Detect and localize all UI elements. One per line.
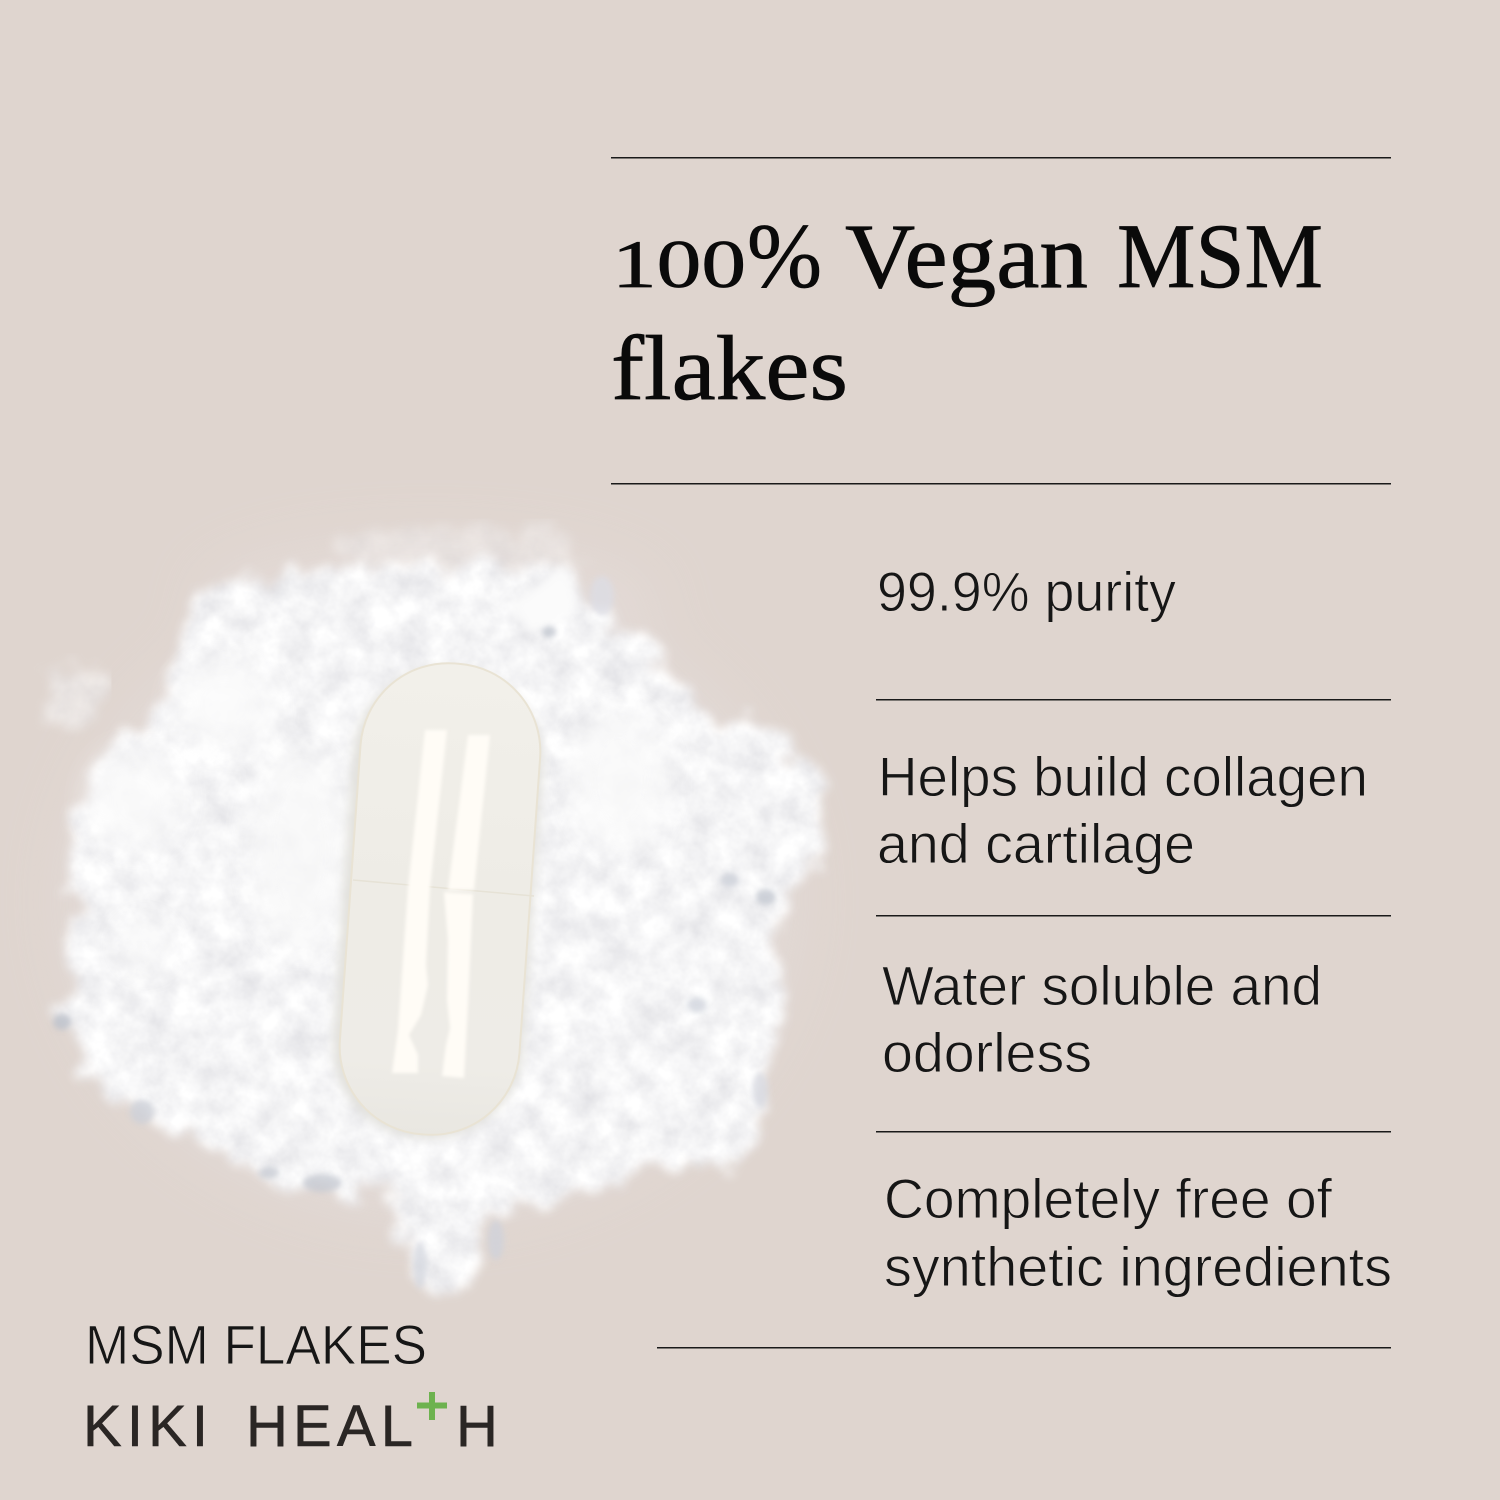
rule 1	[876, 699, 1391, 700]
capsule	[327, 657, 549, 1144]
logo wordmark HEAL: HEAL	[246, 1394, 413, 1459]
capsule highlights	[392, 730, 490, 1078]
logo letter H: H	[456, 1394, 498, 1459]
title: %	[747, 205, 822, 307]
powder pile with capsule	[40, 525, 820, 1290]
title: 100	[612, 226, 746, 302]
bottom rule	[657, 1347, 1391, 1348]
benefit: collagen: Helps build collagen	[878, 745, 1368, 808]
benefit: collagen	[877, 745, 1368, 875]
capsule shadow	[327, 662, 549, 1144]
rule 2	[876, 915, 1391, 916]
title: MSM	[1117, 205, 1323, 307]
title rule	[611, 483, 1391, 484]
benefit: free of synthetic	[884, 1167, 1392, 1298]
benefit: purity: 99.9% purity	[877, 560, 1176, 623]
benefit: collagen: and cartilage	[877, 812, 1195, 875]
title: Vegan	[845, 205, 1088, 307]
product label: MSM FLAKES	[85, 1313, 427, 1376]
rule 3	[876, 1131, 1391, 1132]
logo green plus	[417, 1392, 447, 1420]
top rule	[611, 157, 1391, 158]
benefit: water soluble: odorless	[882, 1021, 1092, 1084]
capsule body	[334, 657, 546, 1141]
capsule seam	[353, 880, 534, 896]
powder pile	[40, 525, 820, 1290]
title: flakes	[611, 317, 848, 419]
benefit: free of synthetic: Completely free of	[884, 1167, 1332, 1230]
logo	[83, 1392, 498, 1459]
benefit: water soluble	[882, 954, 1322, 1084]
logo wordmark KIKI: KIKI	[83, 1394, 208, 1459]
benefit: free of synthetic: synthetic ingredients	[884, 1235, 1392, 1298]
title	[611, 205, 1323, 419]
benefit: water soluble: Water soluble and	[882, 954, 1322, 1017]
